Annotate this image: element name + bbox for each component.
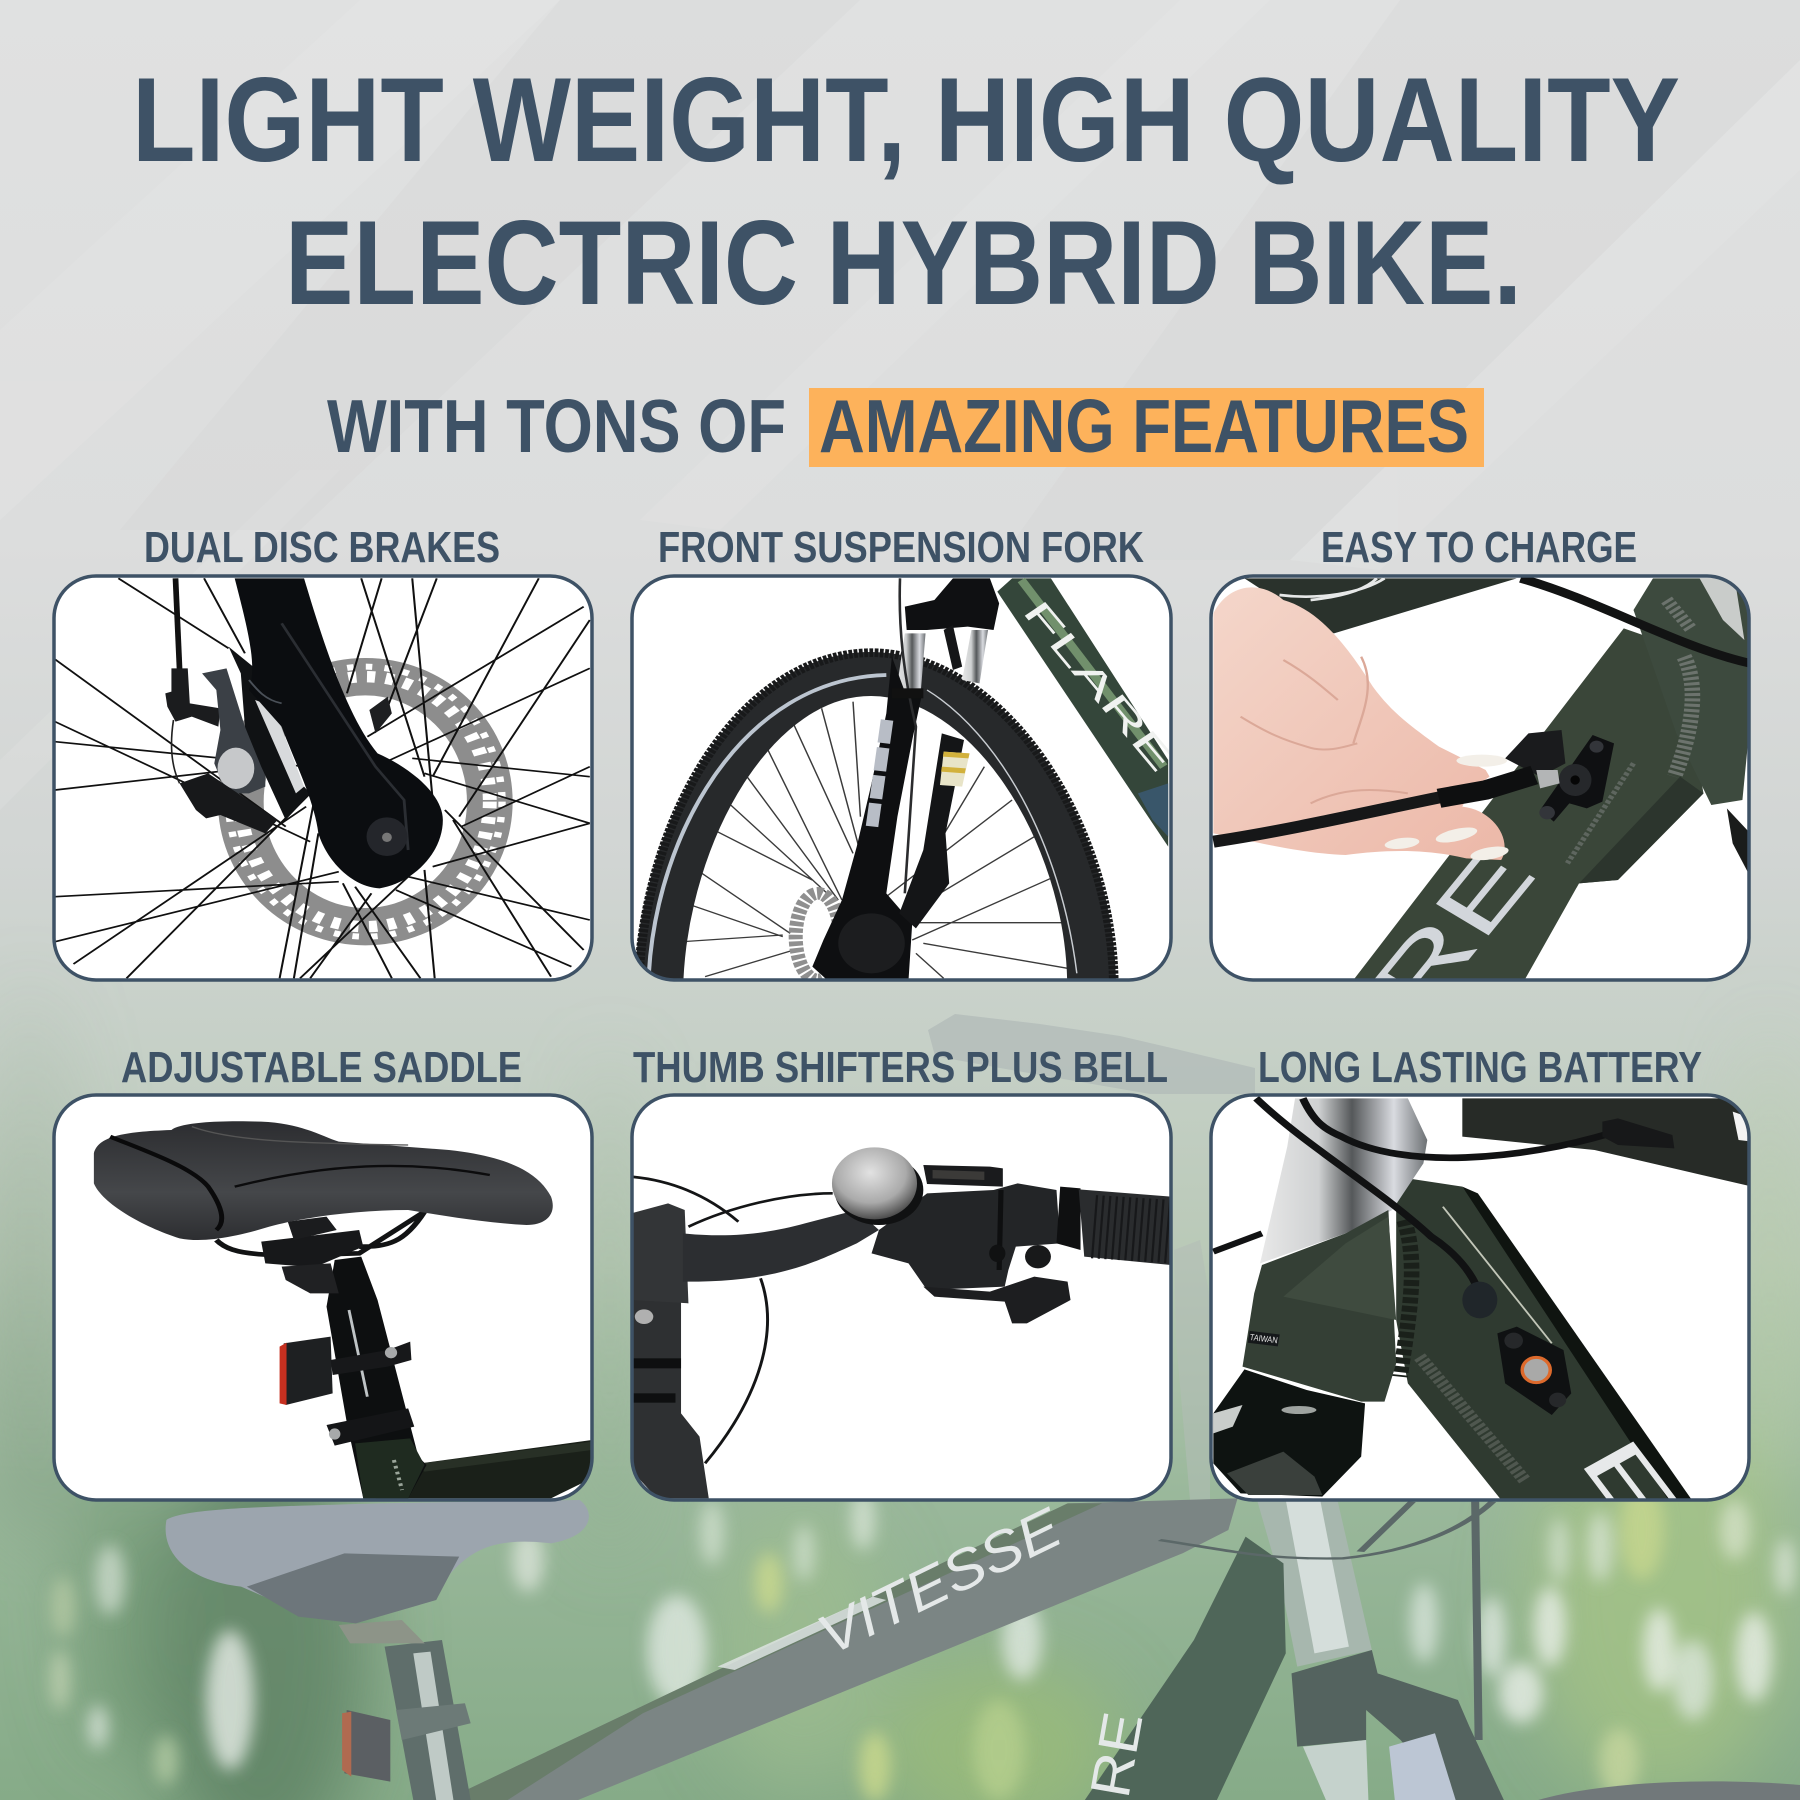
background bike: brand text on frame: VITESSE — [808, 1495, 1071, 1667]
heading: dual disc brakes: DUAL DISC BRAKES — [144, 523, 500, 572]
frame tube with brand text — [997, 578, 1183, 847]
cable grommet — [1602, 1118, 1674, 1148]
subtitle with highlight — [327, 384, 1484, 468]
brake caliper and cable — [165, 578, 392, 833]
rear light — [280, 1337, 333, 1405]
panel: dual disc brakes — [54, 523, 592, 980]
tire — [638, 653, 1114, 983]
background: blurred foliage with grey wash — [0, 747, 1800, 1800]
panel: long lasting battery — [1211, 1043, 1752, 1541]
seat rails and clamp — [216, 1212, 424, 1293]
heading: adjustable saddle: ADJUSTABLE SADDLE — [121, 1043, 522, 1092]
saddle — [94, 1121, 553, 1240]
cables — [1213, 1098, 1610, 1307]
panel: easy to charge — [1209, 532, 1751, 982]
photo: handlebar, shifter and bell — [631, 1095, 1171, 1500]
heading: thumb shifters plus bell: THUMB SHIFTERS PLUS BELL — [633, 1043, 1168, 1092]
suspension fork — [812, 578, 999, 980]
bell — [832, 1147, 923, 1225]
thumb lever — [923, 1277, 1071, 1323]
green collar — [1243, 1210, 1396, 1402]
heading: long lasting battery: LONG LASTING BATTERY — [1258, 1043, 1702, 1092]
hand — [1213, 587, 1510, 863]
photo: hand plugging in charger — [1212, 578, 1748, 978]
down tube — [1396, 1177, 1697, 1541]
background bike: seat post and rear light — [339, 1620, 471, 1800]
fingernails — [1384, 755, 1510, 863]
photo: fork and front wheel — [632, 576, 1183, 983]
photo: saddle and seat post — [54, 1095, 592, 1500]
charging port — [1505, 730, 1614, 822]
title: ELECTRIC HYBRID BIKE. — [285, 196, 1522, 330]
bike frame — [1244, 578, 1748, 978]
background bike: suspension fork — [1292, 1650, 1504, 1800]
panel: thumb shifters plus bell — [631, 1043, 1171, 1500]
spokes — [55, 578, 590, 978]
wheel spokes — [681, 702, 1068, 978]
fork crown — [1213, 1369, 1365, 1497]
frame brand text: FLARE — [1015, 594, 1183, 779]
handlebar — [683, 1210, 879, 1282]
made in Taiwan label: TAIWAN — [1249, 1332, 1279, 1345]
seat post — [327, 1257, 427, 1498]
top tube — [376, 1440, 592, 1498]
stem — [631, 1203, 709, 1498]
brake rotor — [796, 893, 840, 980]
subtitle with highlight: WITH TONS OF — [327, 384, 786, 468]
background bike: head tube — [1257, 1500, 1372, 1667]
charger cable and plug — [1213, 770, 1560, 842]
shifter body — [872, 1165, 1060, 1290]
photo: head tube and battery button — [1211, 1095, 1752, 1541]
panel: adjustable saddle — [54, 1043, 592, 1500]
background bike: top tube — [442, 1498, 1238, 1800]
heading: easy to charge: EASY TO CHARGE — [1321, 523, 1637, 572]
background bike: ghosted frame, saddle, fork and handlebar — [166, 1014, 1800, 1800]
photo: brake rotor and spokes — [54, 576, 592, 980]
panel: front suspension fork — [632, 523, 1183, 983]
background bike: down tube — [1085, 1537, 1286, 1800]
seat clamps — [327, 1342, 414, 1446]
cables — [631, 1177, 833, 1463]
background bike: saddle — [166, 1500, 589, 1623]
heading: front suspension fork: FRONT SUSPENSION FORK — [658, 523, 1144, 572]
background bike: cables — [1159, 1502, 1492, 1740]
title — [132, 53, 1680, 330]
frame brand text: RE — [1351, 833, 1556, 1030]
background bike: front tire — [1538, 1781, 1800, 1800]
frame brand text: E — [1562, 1424, 1697, 1541]
background bike: handlebar grip — [928, 1014, 1255, 1500]
chrome head tube — [1260, 1098, 1427, 1263]
battery button plate — [1462, 1282, 1571, 1415]
highlight: amazing features: AMAZING FEATURES — [819, 384, 1469, 468]
grip — [1056, 1187, 1171, 1265]
brake rotor — [229, 667, 502, 937]
background bike: FLARE fragment: RE — [1078, 1707, 1155, 1800]
top tube — [1462, 1098, 1752, 1187]
fork leg and hub — [235, 578, 443, 888]
